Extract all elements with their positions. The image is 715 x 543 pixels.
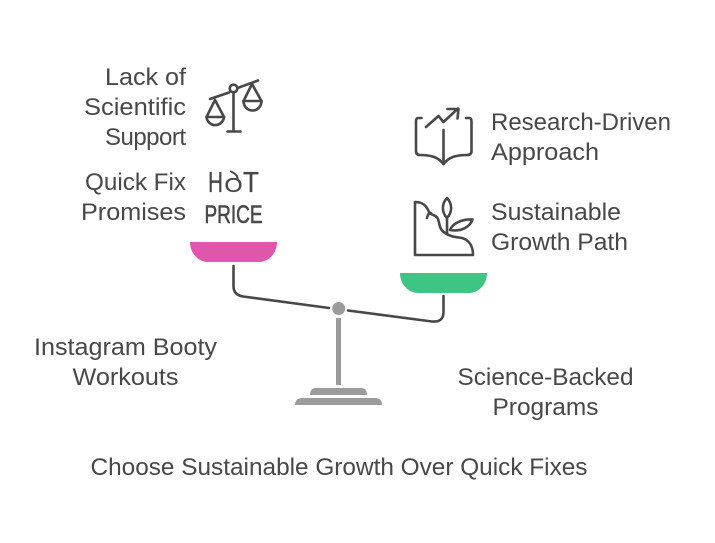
icon: plant on hillside xyxy=(415,198,473,255)
label: Quick Fix Promises: Quick Fix xyxy=(85,169,186,196)
label: Science-Backed Programs: Science-Backed xyxy=(458,364,634,391)
icon: hot price: PRICE xyxy=(204,201,262,229)
label: Lack of Scientific Support: Support xyxy=(105,124,186,151)
label: Instagram Booty Workouts: Instagram Booty xyxy=(34,334,217,361)
scale beam xyxy=(234,266,444,322)
label: Science-Backed Programs: Programs xyxy=(492,394,598,421)
scale stand xyxy=(295,302,382,405)
label: Research-Driven Approach xyxy=(491,109,671,166)
label: Lack of Scientific Support: Lack of xyxy=(105,64,186,91)
label: Quick Fix Promises: Promises xyxy=(81,199,186,226)
label: Science-Backed Programs xyxy=(458,364,634,421)
label: Instagram Booty Workouts: Workouts xyxy=(72,364,178,391)
label: Lack of Scientific Support xyxy=(84,64,186,151)
label: Lack of Scientific Support: Scientific xyxy=(84,94,186,121)
icon: hot price: O xyxy=(224,175,242,197)
label: Instagram Booty Workouts xyxy=(34,334,217,391)
icon: balance scale xyxy=(206,80,262,132)
title: Choose Sustainable Growth Over Quick Fixes xyxy=(90,454,588,481)
label: Research-Driven Approach: Approach xyxy=(491,139,599,166)
icon: hot price: H xyxy=(208,167,223,199)
label: Quick Fix Promises xyxy=(81,169,186,226)
label: Sustainable Growth Path xyxy=(491,199,628,256)
pan: green xyxy=(400,273,487,293)
icon: hot price: T xyxy=(243,167,259,199)
label: Sustainable Growth Path: Sustainable xyxy=(491,199,621,226)
icon: book with rising arrow xyxy=(416,108,472,164)
label: Sustainable Growth Path: Growth Path xyxy=(491,229,628,256)
icon: hot price xyxy=(204,167,262,229)
pan: pink xyxy=(190,242,277,262)
label: Research-Driven Approach: Research-Driven xyxy=(491,109,671,136)
